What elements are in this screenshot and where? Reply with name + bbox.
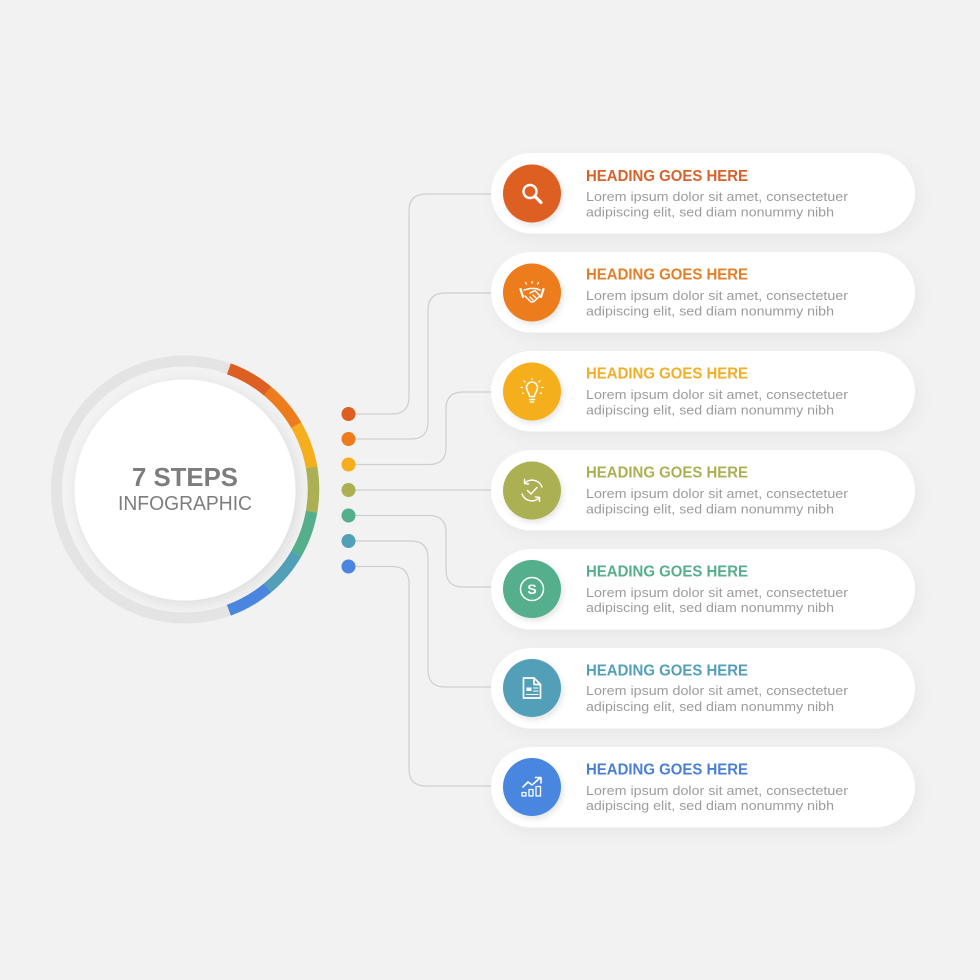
body text <box>586 486 849 516</box>
panel: step 7 <box>491 747 915 828</box>
heading: HEADING GOES HERE <box>586 564 748 580</box>
heading: HEADING GOES HERE <box>586 762 748 778</box>
body text: Lorem ipsum dolor sit amet, consectetuer <box>586 387 849 402</box>
heading: HEADING GOES HERE <box>586 464 748 482</box>
body text <box>586 783 849 813</box>
body text: Lorem ipsum dolor sit amet, consectetuer <box>586 189 849 204</box>
body text <box>586 683 849 714</box>
heading: HEADING GOES HERE <box>586 662 748 680</box>
connector dots <box>342 407 356 574</box>
body text <box>586 189 849 220</box>
panel: step 1 <box>491 153 915 234</box>
body text: adipiscing elit, sed diam nonummy nibh <box>586 204 834 220</box>
body text <box>586 288 849 318</box>
body text: adipiscing elit, sed diam nonummy nibh <box>586 699 834 714</box>
icon: dollar coin: S <box>527 581 537 597</box>
panel: step 2 <box>491 252 915 332</box>
icon: dollar coin <box>503 560 561 618</box>
body text <box>586 387 849 418</box>
body text: adipiscing elit, sed diam nonummy nibh <box>586 600 834 615</box>
body text: Lorem ipsum dolor sit amet, consectetuer <box>586 486 849 501</box>
icon: refresh check <box>503 462 561 520</box>
connector lines <box>349 194 492 786</box>
main circle <box>56 361 314 618</box>
white centre disc <box>74 380 296 600</box>
grey outer ring <box>56 361 314 618</box>
body text <box>586 585 849 615</box>
heading: HEADING GOES HERE <box>586 168 748 185</box>
icon: magnifier <box>503 164 561 222</box>
coloured arc segments <box>229 369 313 610</box>
panel: step 4 <box>491 450 915 530</box>
panel: step 5 <box>491 549 915 630</box>
centre title: 7 STEPS <box>132 462 238 492</box>
centre subtitle: INFOGRAPHIC <box>118 493 252 515</box>
body text: Lorem ipsum dolor sit amet, consectetuer <box>586 585 849 600</box>
icon: light bulb <box>503 362 561 420</box>
panel: step 6 <box>491 648 915 728</box>
panel: step 3 <box>491 351 915 432</box>
icon: growth chart <box>503 758 561 816</box>
body text: adipiscing elit, sed diam nonummy nibh <box>586 304 834 318</box>
icon: handshake <box>503 264 561 322</box>
body text: adipiscing elit, sed diam nonummy nibh <box>586 402 834 418</box>
body text: adipiscing elit, sed diam nonummy nibh <box>586 798 834 813</box>
body text: Lorem ipsum dolor sit amet, consectetuer <box>586 683 849 698</box>
body text: Lorem ipsum dolor sit amet, consectetuer <box>586 288 849 303</box>
body text: adipiscing elit, sed diam nonummy nibh <box>586 502 834 516</box>
icon: document <box>503 659 561 717</box>
body text: Lorem ipsum dolor sit amet, consectetuer <box>586 783 849 798</box>
heading: HEADING GOES HERE <box>586 366 748 382</box>
heading: HEADING GOES HERE <box>586 266 748 284</box>
